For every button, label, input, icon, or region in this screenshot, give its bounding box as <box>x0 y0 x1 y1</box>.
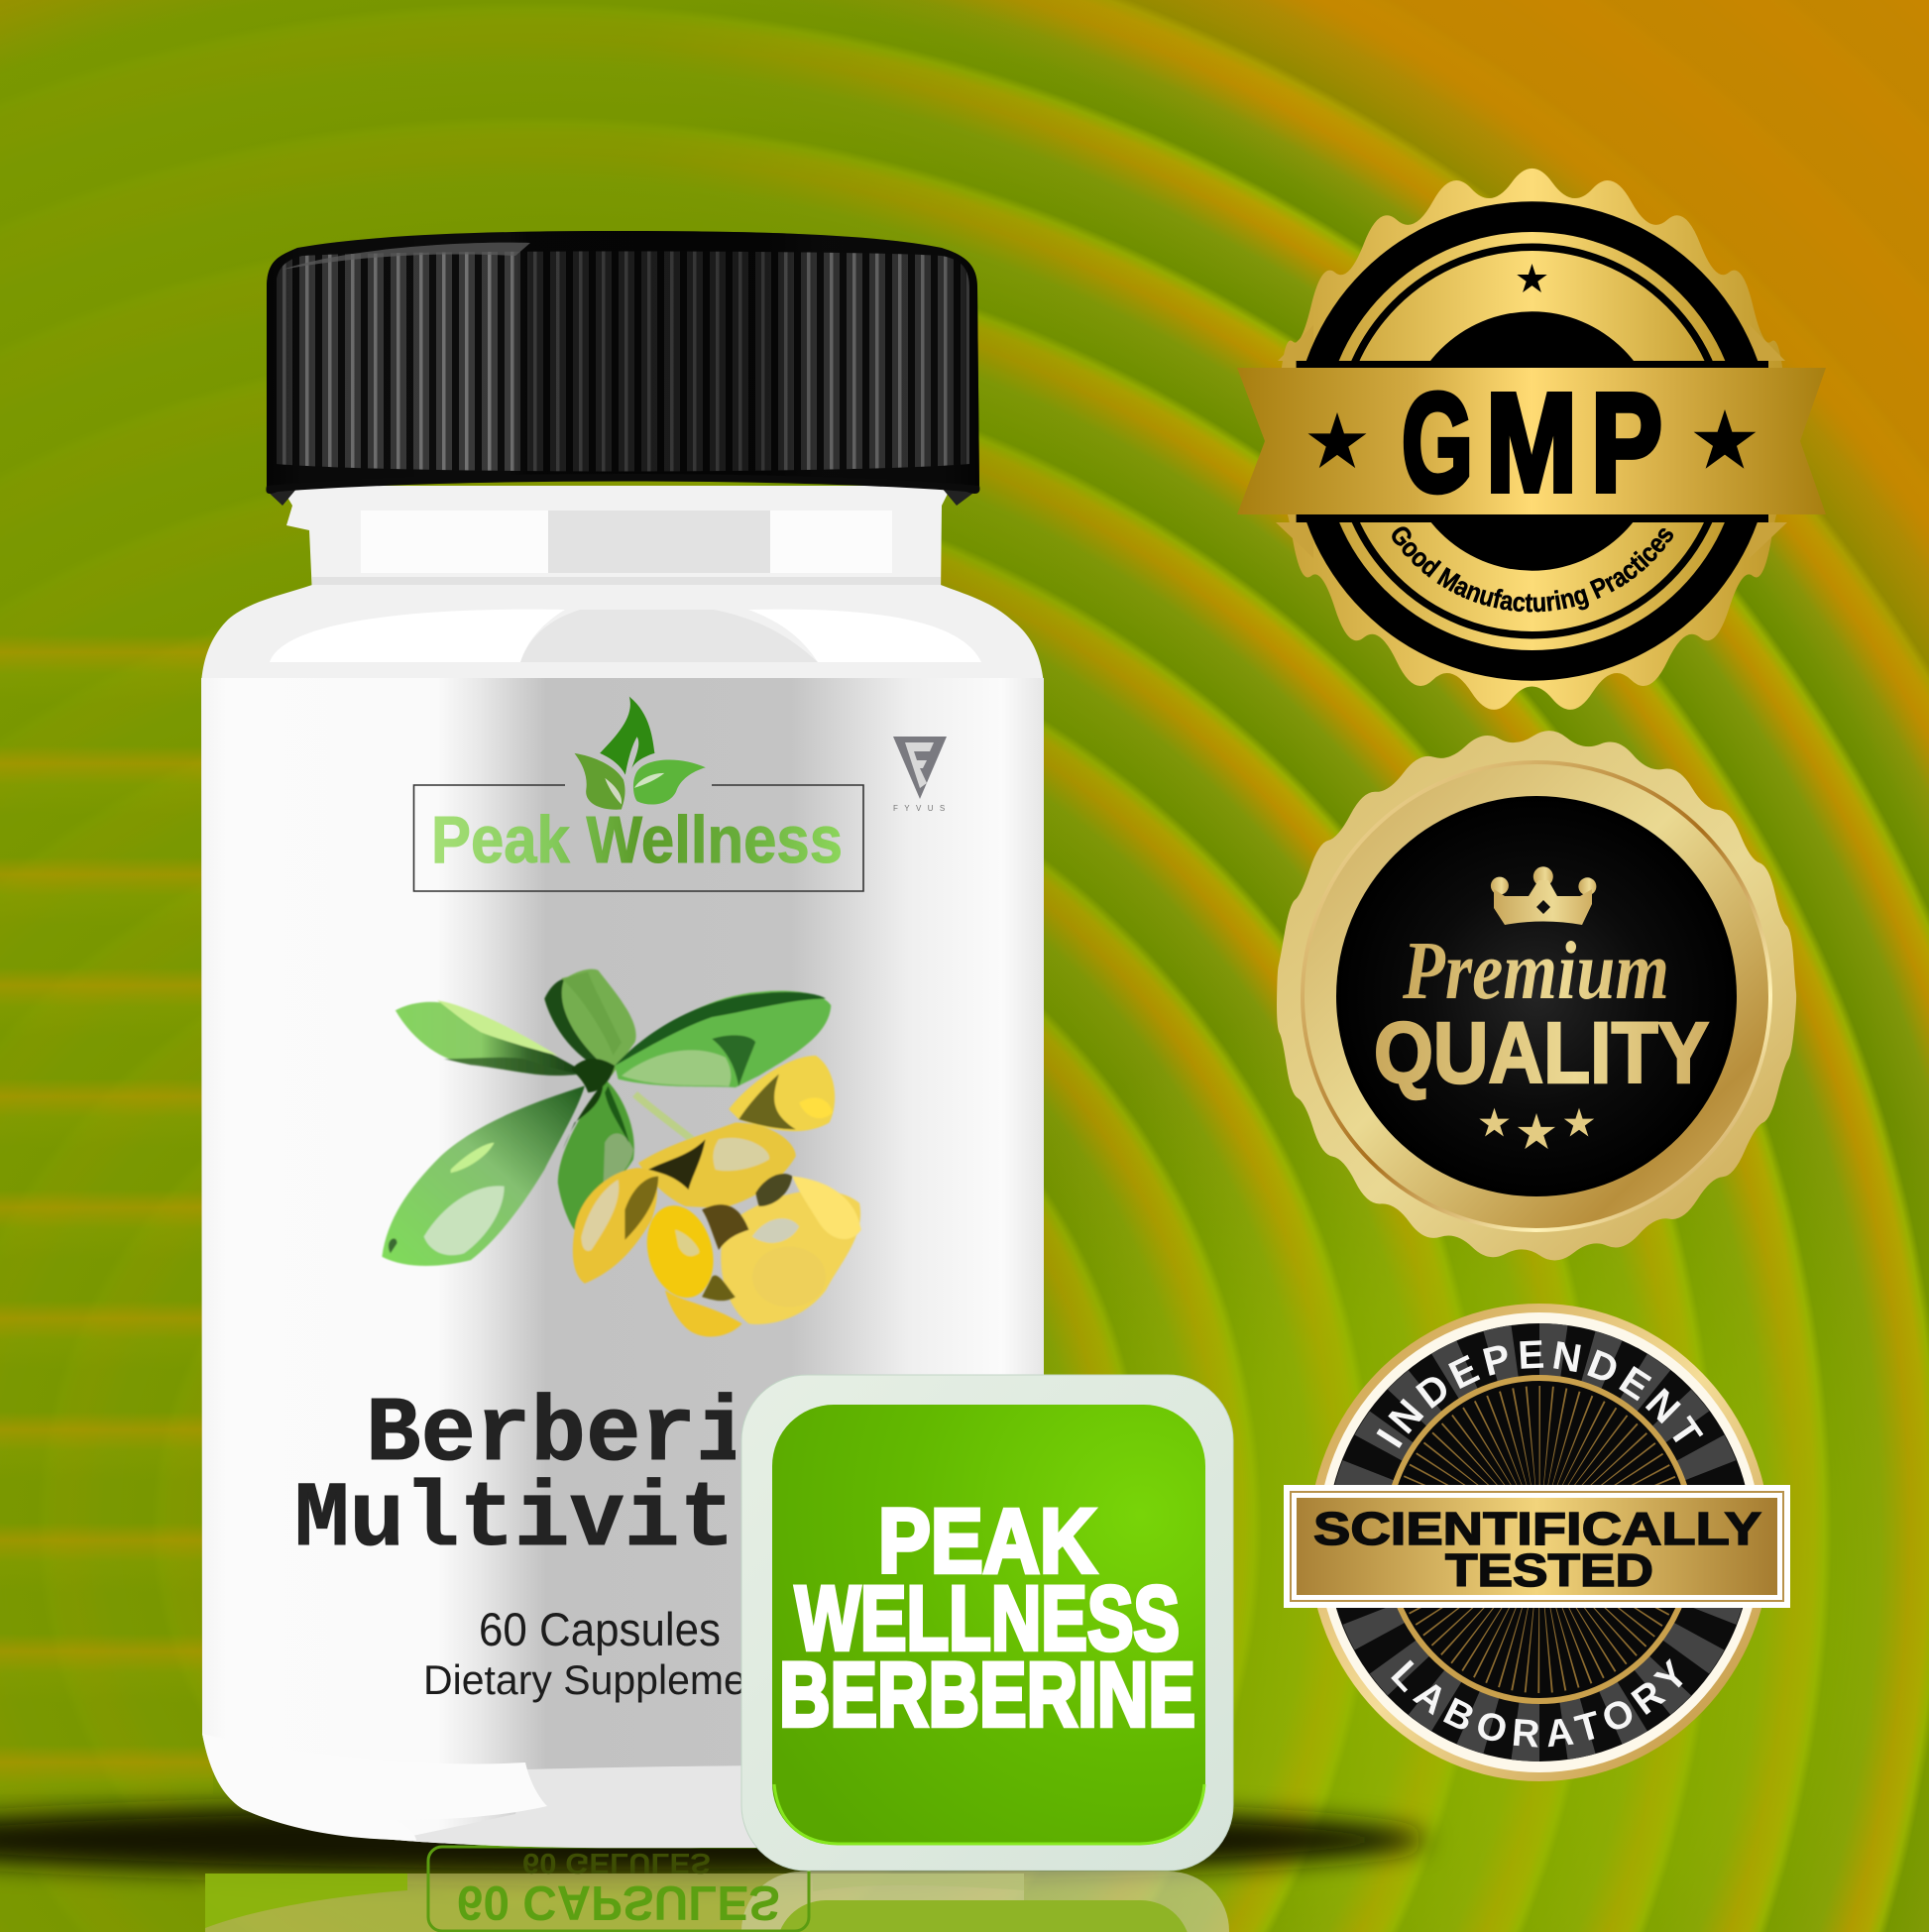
bottle body <box>201 678 1044 1848</box>
icon: FYVUS logo: FYVUS <box>893 804 952 813</box>
bottle <box>201 231 1044 1848</box>
ribbon <box>1237 368 1826 514</box>
badge: Premium Quality <box>1263 717 1810 1273</box>
leaf top-centre <box>544 969 636 1076</box>
inner gold ring <box>1386 1378 1693 1701</box>
floor reflection <box>205 1847 1229 1932</box>
black ring <box>1293 201 1771 681</box>
tile rim <box>741 1375 1233 1871</box>
thin ring <box>1338 247 1726 635</box>
bottle base <box>202 1734 1044 1848</box>
ribbon backing <box>1297 361 1768 522</box>
tile bottom highlight <box>774 1784 1204 1844</box>
black centre <box>1403 311 1661 571</box>
badge: Independent Laboratory <box>1284 1304 1790 1781</box>
gold inner disc <box>1322 232 1741 650</box>
bottle neck <box>281 486 952 595</box>
leaf lower-centre <box>558 1080 634 1230</box>
QUALITY text: QUALITY <box>1374 1005 1709 1101</box>
plate <box>1284 1485 1790 1608</box>
background: left horizontal stripes <box>0 634 213 1794</box>
icon: three green leaves <box>574 697 706 810</box>
floor shadow <box>0 1802 1427 1877</box>
icon: FYVUS logo <box>893 737 952 813</box>
seal scalloped edge <box>1273 169 1791 710</box>
script word: Premium <box>1402 925 1669 1017</box>
plate text: SCIENTIFICALLY <box>1313 1503 1761 1554</box>
tile text: PEAK <box>878 1491 1096 1592</box>
label frame <box>414 785 863 891</box>
INDEPENDENT text: INDEPENDENT <box>1376 1340 1703 1448</box>
brand label: Peak Wellness <box>414 697 863 891</box>
icon: crown <box>1491 866 1596 925</box>
GMP text: G <box>1402 364 1473 520</box>
leaf top-left <box>396 1000 585 1076</box>
plate text: TESTED <box>1445 1544 1653 1596</box>
tile text: BERBERINE <box>779 1645 1195 1746</box>
leaf centre knot <box>571 1059 615 1092</box>
tile text: WELLNESS <box>795 1568 1180 1669</box>
GMP text: M <box>1486 364 1577 520</box>
capsule count: 60 Capsules <box>479 1603 721 1655</box>
curved tagline: Good Manufacturing Practices <box>1392 526 1673 613</box>
black disc <box>1336 796 1737 1196</box>
yellow flower <box>573 1056 861 1336</box>
top star <box>1517 264 1547 292</box>
supplement line: Dietary Supplement <box>423 1656 780 1703</box>
leaf top-right <box>615 990 831 1087</box>
band sunburst <box>1356 1352 1723 1733</box>
LABORATORY text: LABORATORY <box>1391 1658 1683 1748</box>
black band <box>1326 1323 1753 1762</box>
gold ring <box>1303 762 1770 1230</box>
three stars <box>1479 1108 1594 1149</box>
product name: Multivitamin <box>294 1468 955 1572</box>
flower stem <box>635 1094 692 1139</box>
seal wings <box>1276 325 1787 558</box>
floor reflection: 60 CAPSULES <box>457 1875 780 1929</box>
bottle shoulder <box>201 585 1044 684</box>
plate text <box>1313 1503 1761 1596</box>
scalloped edge <box>1263 717 1810 1273</box>
ribbon stars <box>1308 409 1756 469</box>
leaf lower-left <box>382 1085 585 1266</box>
badge: GMP <box>1237 169 1826 710</box>
product name: Berberine <box>366 1383 861 1487</box>
tile face <box>772 1405 1205 1845</box>
tile text <box>779 1491 1195 1746</box>
illustration: berberine leaves and yellow flower <box>382 969 861 1336</box>
product name <box>297 1392 736 1546</box>
green tile: Peak Wellness Berberine <box>741 1375 1233 1871</box>
white ring <box>1317 1312 1761 1772</box>
floor reflection: 60 GELULES <box>522 1847 711 1878</box>
bottle cap <box>266 231 979 506</box>
brand name: Peak Wellness <box>431 803 843 877</box>
GMP text <box>1402 364 1662 520</box>
GMP text: P <box>1591 364 1662 520</box>
outer gold ring <box>1308 1304 1770 1781</box>
ray burst <box>1440 1435 1639 1644</box>
